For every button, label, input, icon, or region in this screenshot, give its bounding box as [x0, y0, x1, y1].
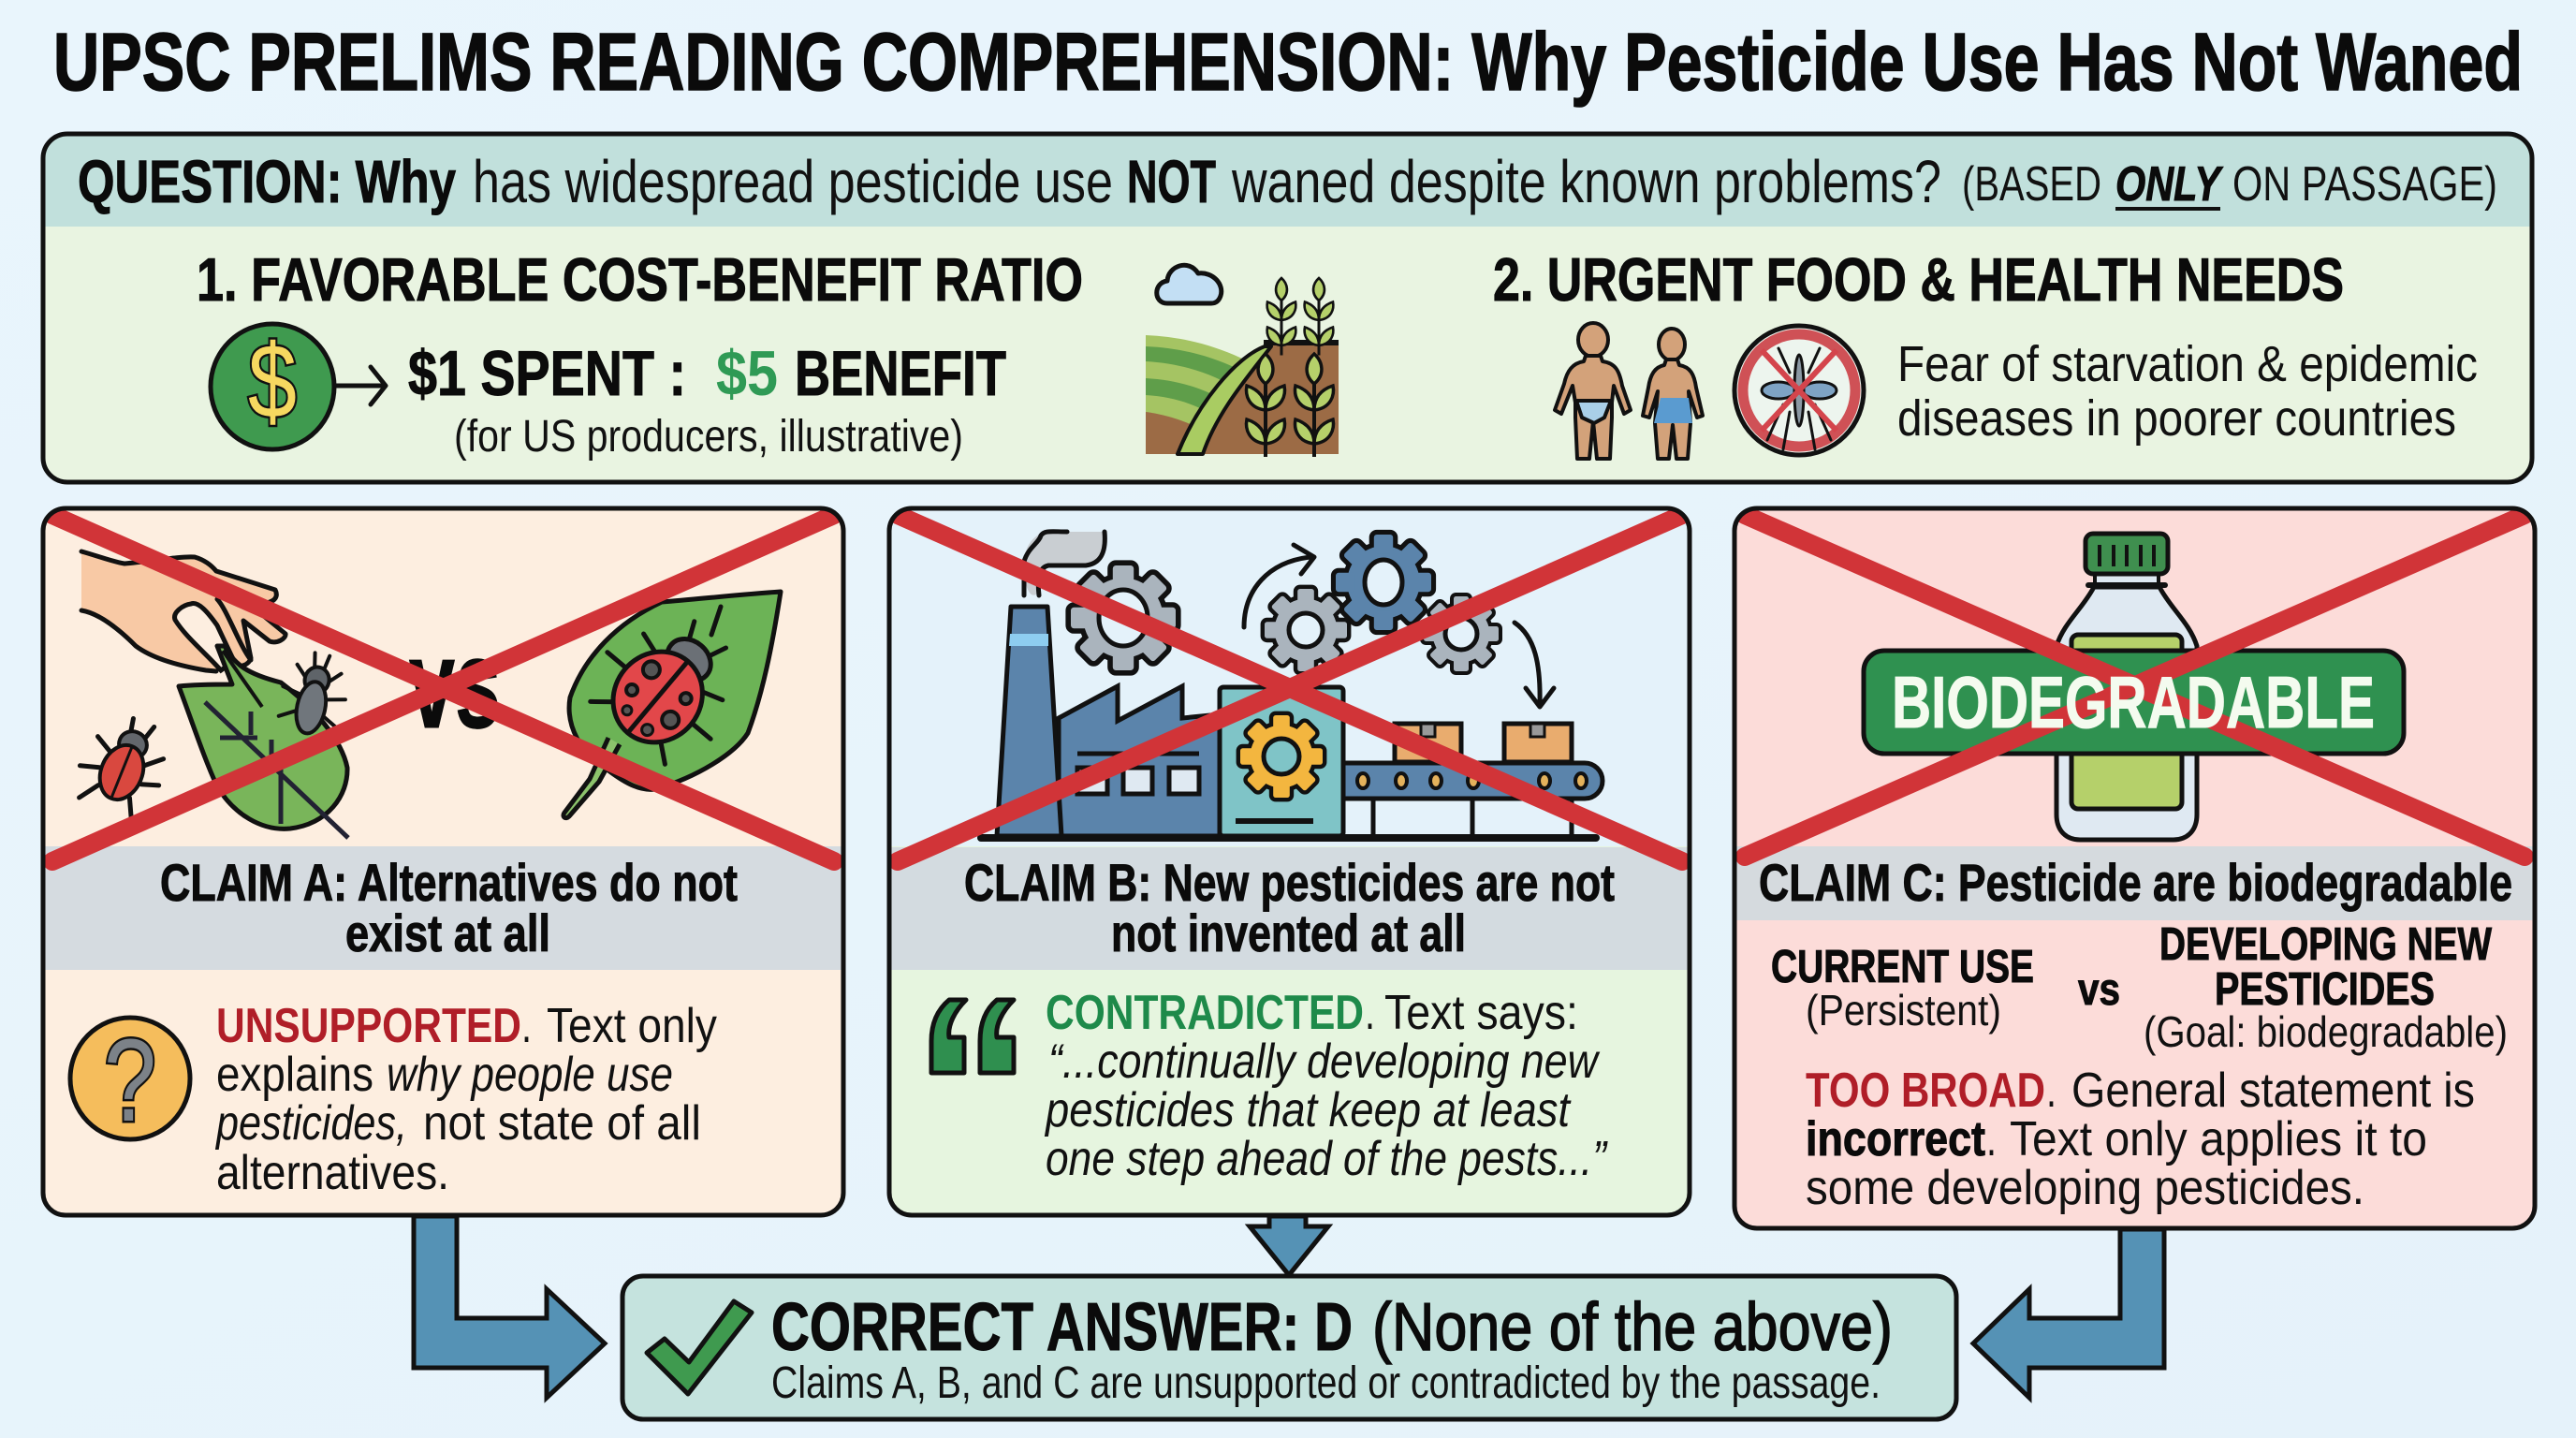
- claim A verdict text: .: [521, 999, 532, 1053]
- claim A verdict text: not state of all: [423, 1096, 701, 1151]
- comparison: current use vs developing new pesticides: PESTICIDES: [2215, 964, 2435, 1015]
- comparison: current use vs developing new pesticides: vs: [2078, 965, 2120, 1015]
- red cross: [52, 515, 834, 861]
- red cross: [1745, 515, 2525, 857]
- comparison: current use vs developing new pesticides: (Goal: biodegradable): [2144, 1007, 2508, 1056]
- question line: ON PASSAGE): [2232, 157, 2497, 212]
- icon: question mark: [70, 1016, 190, 1146]
- claim C verdict text: Text only applies it to: [2010, 1112, 2427, 1167]
- claim C verdict text: .: [2046, 1064, 2056, 1118]
- arrow: claim C to answer: [1973, 1229, 2164, 1398]
- claim A heading: [160, 853, 738, 962]
- claim B heading: [964, 853, 1615, 962]
- cost benefit ratio: [408, 338, 1006, 409]
- icon: farm field: [1146, 278, 1339, 457]
- claim A verdict text: explains: [216, 1048, 373, 1102]
- question line: ONLY: [2115, 157, 2223, 212]
- claim A heading: exist at all: [345, 903, 550, 962]
- claim C verdict text: TOO BROAD: [1806, 1064, 2045, 1118]
- panel: claim C: [1734, 508, 2535, 1228]
- icon: check mark: [647, 1301, 752, 1394]
- icon: dollar coin: [211, 323, 334, 449]
- reason 1 heading: 1. FAVORABLE COST-BENEFIT RATIO: [197, 245, 1083, 314]
- arrow: claim B to answer: [1250, 1216, 1328, 1275]
- cost benefit ratio: $5: [716, 338, 778, 409]
- cost benefit ratio: BENEFIT: [795, 338, 1006, 409]
- question line: QUESTION: Why: [78, 148, 456, 215]
- claim B heading: not invented at all: [1111, 903, 1466, 962]
- claim B verdict text: [1044, 986, 1608, 1186]
- claim A heading: CLAIM A: Alternatives do not: [160, 853, 738, 912]
- claim B heading: CLAIM B: New pesticides are not: [964, 853, 1615, 912]
- icon: dollar coin: $: [248, 323, 297, 440]
- claim B verdict text: one step ahead of the pests...”: [1046, 1132, 1608, 1186]
- claim C verdict text: .: [1986, 1112, 1997, 1167]
- arrow: cost to benefit: [335, 367, 386, 404]
- claim C verdict text: [1806, 1064, 2475, 1215]
- illustration: biodegradable bottle: [1864, 534, 2404, 840]
- claim C band: [1736, 846, 2533, 920]
- ratio note: (for US producers, illustrative): [454, 412, 963, 462]
- panel: correct answer: [622, 1276, 1956, 1419]
- claim B verdict text: “...continually developing new: [1048, 1034, 1601, 1089]
- illustration: factory, gears and conveyor: [981, 532, 1603, 838]
- claim C verdict text: General statement is: [2071, 1064, 2475, 1118]
- comparison: current use vs developing new pesticides: CURRENT USE: [1771, 942, 2034, 992]
- comparison: current use vs developing new pesticides: [1771, 919, 2508, 1056]
- question line: (BASED: [1962, 157, 2101, 212]
- claim A verdict text: UNSUPPORTED: [216, 999, 521, 1053]
- answer heading: [771, 1290, 1893, 1365]
- comparison: current use vs developing new pesticides: DEVELOPING NEW: [2159, 919, 2493, 970]
- claim C verdict text: incorrect: [1806, 1112, 1985, 1167]
- claim B verdict text: .: [1365, 986, 1375, 1040]
- panel: claim A: [43, 508, 843, 1215]
- biodegradable label: BIODEGRADABLE: [1892, 661, 2375, 743]
- red cross: [898, 515, 1682, 861]
- icon: cloud: [1157, 265, 1222, 303]
- icon: no mosquito: [1734, 326, 1864, 455]
- reason 2 text: [1897, 336, 2478, 447]
- claim A verdict text: why people use: [387, 1048, 673, 1102]
- reason 2 text: Fear of starvation & epidemic: [1897, 336, 2478, 392]
- cost benefit ratio: $1 SPENT :: [408, 338, 686, 409]
- question line: NOT: [1127, 148, 1216, 215]
- claim A verdict text: alternatives.: [216, 1146, 449, 1200]
- answer heading: (None of the above): [1372, 1290, 1893, 1365]
- claim A verdict text: [214, 999, 717, 1200]
- icon: question mark: ?: [104, 1016, 156, 1146]
- question line: has widespread pesticide use: [473, 148, 1113, 215]
- question line: [78, 148, 2497, 215]
- panel: question and reasons: [43, 134, 2532, 482]
- reason 2 heading: 2. URGENT FOOD & HEALTH NEEDS: [1493, 245, 2344, 314]
- panel: claim B: [889, 508, 1690, 1215]
- answer heading: CORRECT ANSWER: D: [771, 1290, 1353, 1365]
- claim B band: [891, 847, 1688, 970]
- question line: waned despite known problems?: [1231, 148, 1941, 215]
- arrow: claim A to answer: [414, 1216, 605, 1398]
- claim B verdict text: Text says:: [1384, 986, 1578, 1040]
- illustration: hand picking pests vs ladybird: [68, 551, 781, 838]
- comparison: current use vs developing new pesticides: (Persistent): [1806, 986, 2001, 1034]
- answer explanation: Claims A, B, and C are unsupported or contradicted by the passage.: [771, 1358, 1881, 1408]
- icon: quotation mark: [931, 1000, 1014, 1073]
- claim A verdict text: Text only: [547, 999, 717, 1053]
- claim B verdict text: CONTRADICTED: [1046, 986, 1364, 1040]
- icon: starving people: [1555, 323, 1703, 459]
- claim C verdict text: some developing pesticides.: [1806, 1161, 2364, 1215]
- reason 2 text: diseases in poorer countries: [1897, 390, 2456, 447]
- illustration: hand picking pests vs ladybird: vs: [409, 612, 501, 755]
- claim A band: [45, 846, 842, 970]
- claim A verdict text: pesticides,: [214, 1096, 407, 1151]
- claim B verdict text: pesticides that keep at least: [1044, 1083, 1572, 1137]
